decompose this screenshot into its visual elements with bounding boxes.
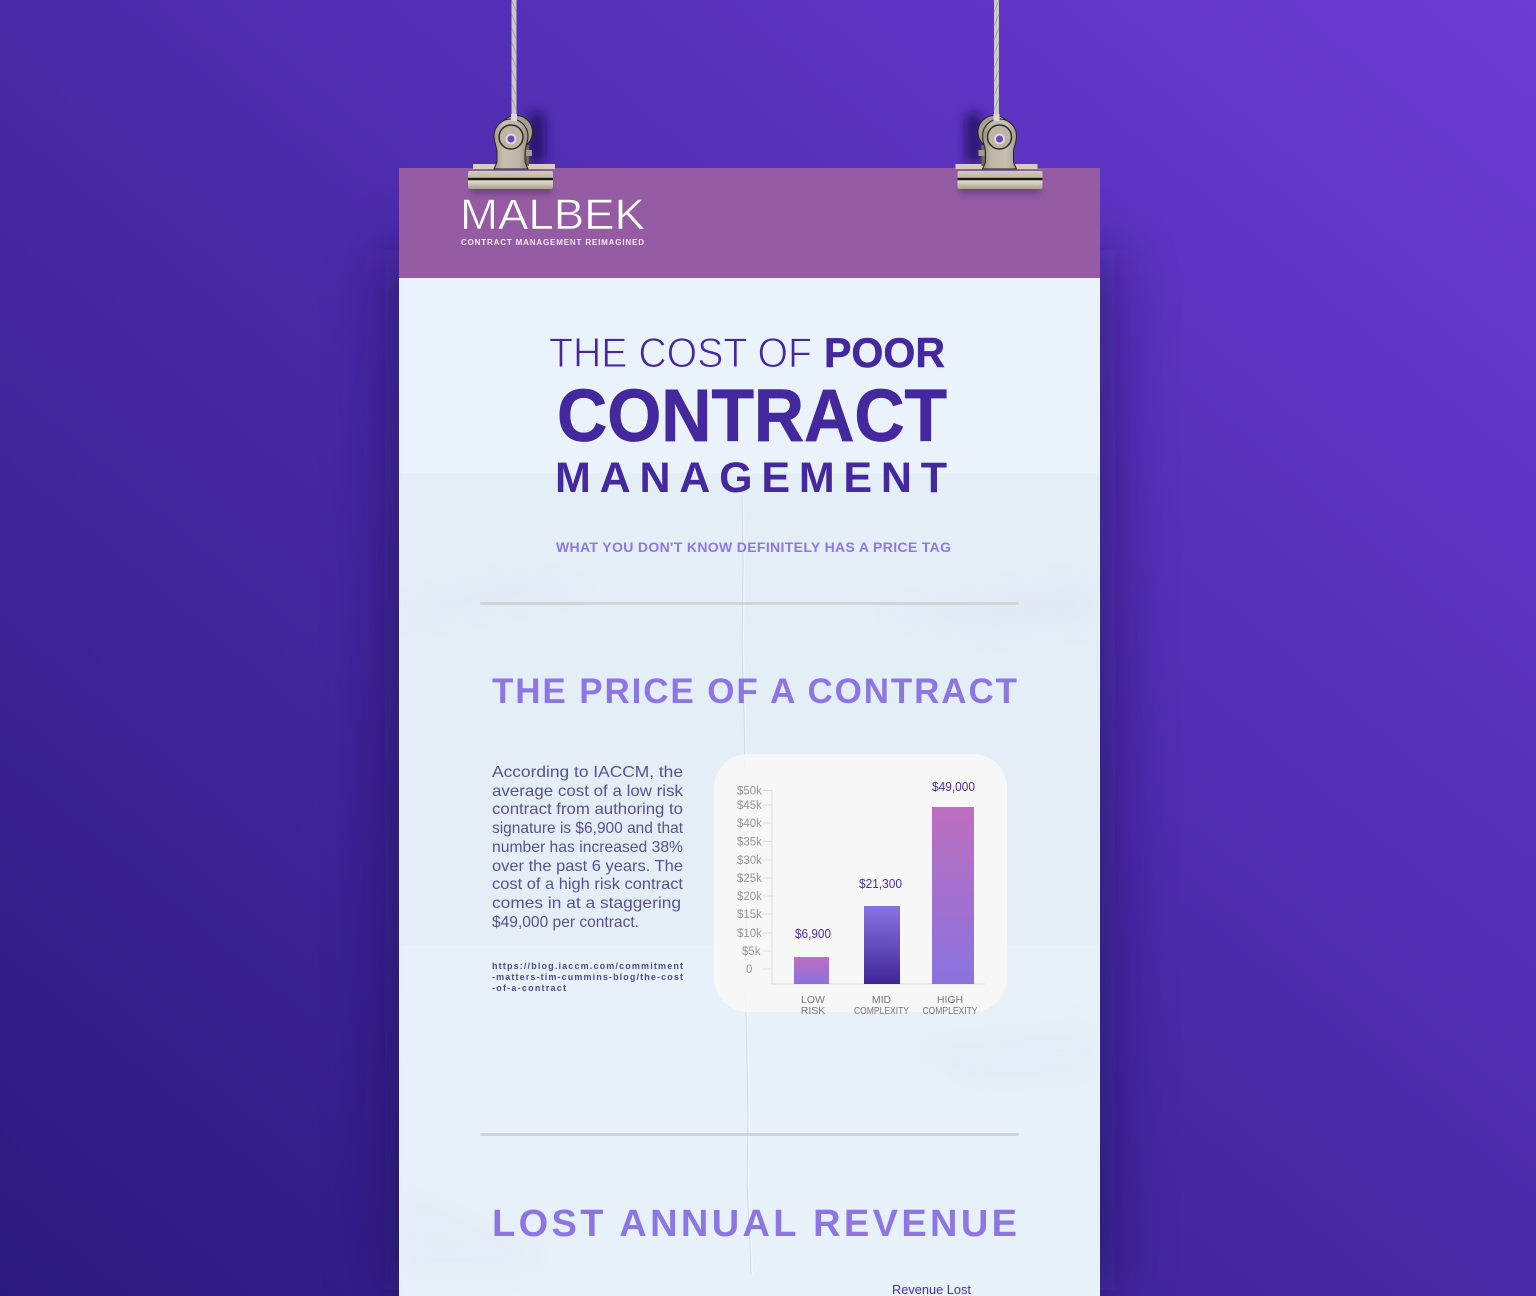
source link: https://blog.iaccm.com/commitment bbox=[492, 961, 683, 971]
bar: low risk bbox=[794, 957, 829, 984]
binder clip right bbox=[956, 0, 1042, 194]
y axis: $50k bbox=[737, 786, 762, 798]
y axis: 0 bbox=[746, 964, 752, 976]
y axis: $40k bbox=[737, 818, 762, 830]
value labels: $6,900 bbox=[795, 927, 831, 941]
logo: CONTRACT MANAGEMENT REIMAGINED bbox=[461, 238, 644, 247]
y axis: $35k bbox=[737, 836, 762, 848]
source link bbox=[492, 961, 683, 993]
chart panel bbox=[714, 754, 1007, 1012]
source link: -of-a-contract bbox=[492, 983, 566, 993]
body text: over the past 6 years. The bbox=[492, 858, 683, 875]
y axis: $30k bbox=[737, 855, 762, 867]
body text: $49,000 per contract. bbox=[492, 914, 639, 931]
section heading: the price of a contract: THE PRICE OF A CONTRACT bbox=[492, 672, 1017, 711]
category labels: RISK bbox=[801, 1005, 825, 1017]
body text: cost of a high risk contract bbox=[492, 876, 684, 893]
bar: high complexity bbox=[932, 807, 974, 984]
divider bbox=[480, 602, 1019, 605]
body text: contract from authoring to bbox=[492, 801, 683, 818]
title bbox=[549, 329, 947, 502]
category labels: LOW bbox=[801, 994, 825, 1006]
source link: -matters-tim-cummins-blog/the-cost bbox=[492, 972, 683, 982]
y axis: $10k bbox=[737, 928, 762, 940]
bar chart bbox=[737, 780, 985, 1017]
header band bbox=[399, 168, 1100, 278]
title: THE COST OF bbox=[549, 329, 812, 376]
category labels: HIGH bbox=[937, 994, 963, 1006]
binder clip left bbox=[468, 0, 555, 194]
body text: signature is $6,900 and that bbox=[492, 820, 684, 837]
divider bbox=[480, 1133, 1019, 1136]
y axis bbox=[737, 786, 985, 984]
y axis: $20k bbox=[737, 891, 762, 903]
y axis: $15k bbox=[737, 909, 762, 921]
y axis: $25k bbox=[737, 873, 762, 885]
body text: comes in at a staggering bbox=[492, 895, 681, 912]
section heading: lost annual revenue: LOST ANNUAL REVENUE bbox=[492, 1203, 1017, 1245]
category labels: COMPLEXITY bbox=[854, 1005, 909, 1017]
title: MANAGEMENT bbox=[555, 454, 947, 502]
body text: According to IACCM, the bbox=[492, 764, 683, 781]
title: POOR bbox=[824, 329, 945, 376]
y axis: $5k bbox=[742, 946, 761, 958]
bar: mid complexity bbox=[864, 906, 900, 984]
logo: MALBEK bbox=[460, 191, 645, 239]
value labels bbox=[795, 780, 975, 941]
category labels bbox=[801, 994, 978, 1017]
title: CONTRACT bbox=[557, 374, 947, 457]
y axis: $45k bbox=[737, 800, 762, 812]
category labels: MID bbox=[872, 994, 892, 1006]
value labels: $21,300 bbox=[859, 877, 902, 891]
body text: number has increased 38% bbox=[492, 839, 683, 856]
poster shadow bbox=[385, 250, 1115, 1290]
body text: average cost of a low risk bbox=[492, 783, 684, 800]
subtitle: WHAT YOU DON'T KNOW DEFINITELY HAS A PRICE TAG bbox=[556, 539, 951, 555]
category labels: COMPLEXITY bbox=[922, 1005, 978, 1017]
value labels: $49,000 bbox=[932, 780, 975, 794]
body text bbox=[492, 764, 684, 931]
poster paper bbox=[399, 168, 1100, 1296]
